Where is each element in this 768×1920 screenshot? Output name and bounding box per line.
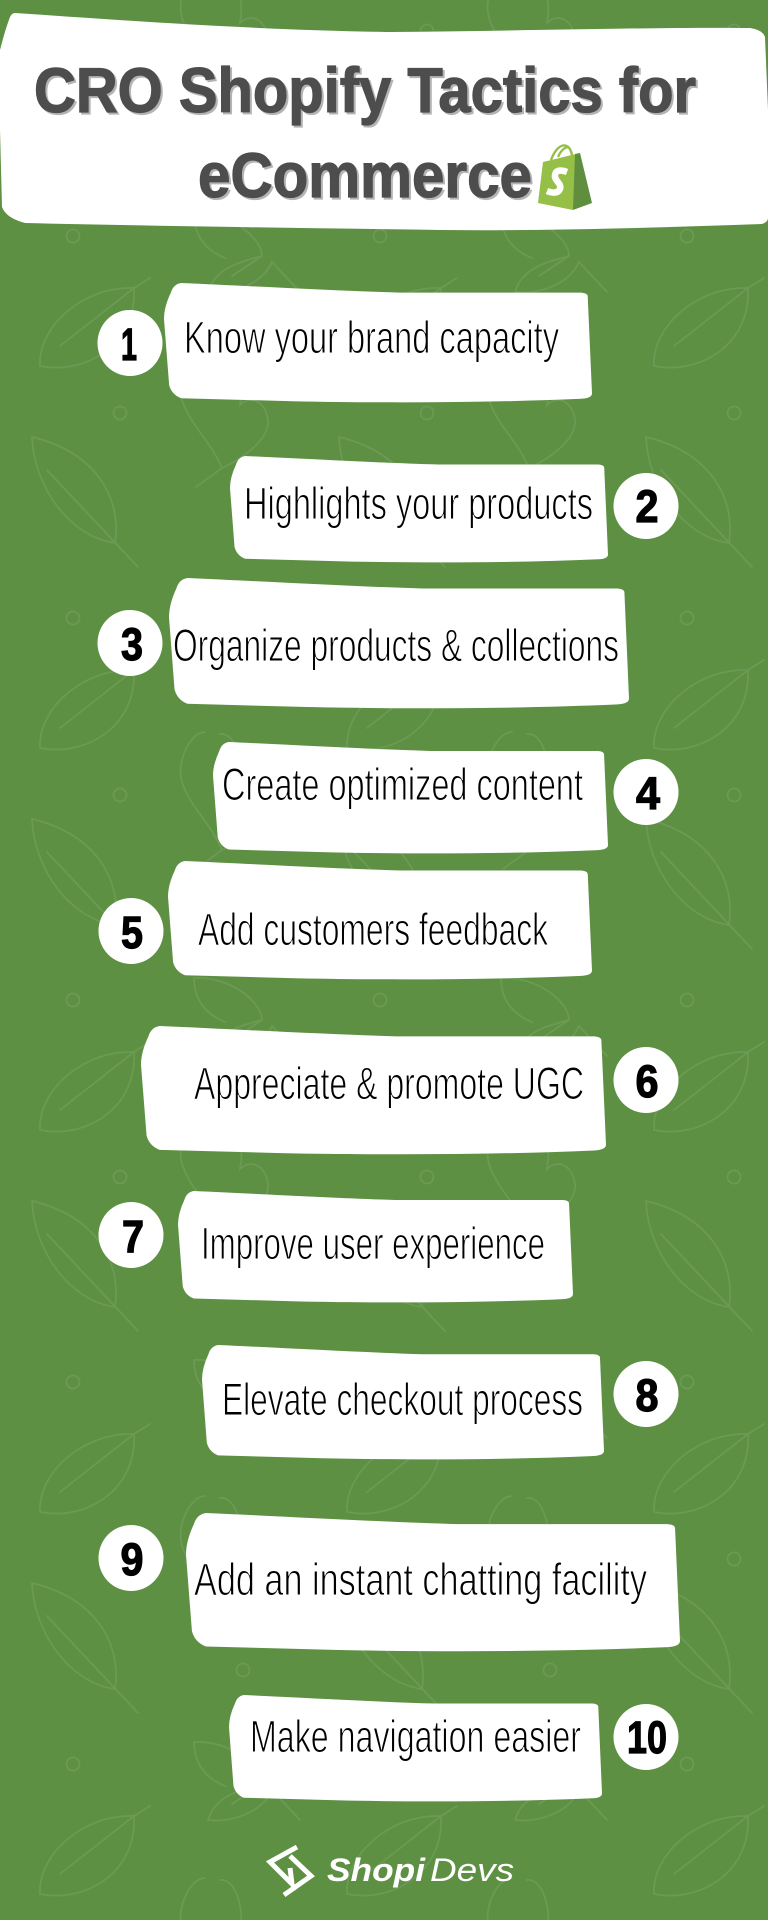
number badge 2: 2 xyxy=(636,481,658,532)
text 5: Add customers feedback xyxy=(198,904,548,955)
text 7: Improve user experience xyxy=(201,1218,545,1269)
logo: ShopiDevs xyxy=(270,1847,514,1895)
number badge 3: 3 xyxy=(121,619,143,670)
header white brush shape xyxy=(0,13,768,230)
box 2 xyxy=(230,456,608,562)
text 6: Appreciate & promote UGC xyxy=(194,1058,584,1109)
title text: CRO Shopify Tactics for xyxy=(36,58,698,128)
item 10 xyxy=(229,1695,678,1801)
number badge 6: 6 xyxy=(636,1056,658,1107)
number badge 9: 9 xyxy=(120,1534,144,1585)
item 7 xyxy=(98,1191,573,1302)
number badge 3 xyxy=(98,610,162,676)
number badge 5 xyxy=(98,898,164,964)
number badge 7: 7 xyxy=(122,1211,144,1262)
number badge 10 xyxy=(614,1704,678,1770)
number badge 4 xyxy=(614,759,678,825)
box 4 xyxy=(213,742,608,853)
title text: eCommerce xyxy=(200,143,534,213)
number badge 5: 5 xyxy=(121,907,143,958)
number badge 1 xyxy=(98,310,162,376)
number badge 9 xyxy=(98,1525,164,1591)
text 10: Make navigation easier xyxy=(250,1711,581,1762)
title text: eCommerce xyxy=(198,141,532,211)
icon: ShopiDevs mark xyxy=(270,1847,311,1895)
box 6 xyxy=(141,1026,606,1154)
panel: title header xyxy=(0,13,768,230)
icon: Shopify bag xyxy=(538,145,592,210)
text 2: Highlights your products xyxy=(244,478,593,529)
wordmark: Shopi xyxy=(327,1852,426,1888)
number badge 8 xyxy=(614,1361,678,1427)
item 2 xyxy=(230,456,678,562)
box 10 xyxy=(229,1695,602,1801)
title text: CRO Shopify Tactics for xyxy=(34,56,696,126)
box 9 xyxy=(186,1513,680,1651)
box 8 xyxy=(202,1345,604,1459)
number badge 6 xyxy=(614,1047,678,1113)
number badge 8: 8 xyxy=(636,1370,658,1421)
text 1: Know your brand capacity xyxy=(184,312,559,363)
number badge 7 xyxy=(98,1202,164,1268)
box 3 xyxy=(169,578,629,708)
item 9 xyxy=(98,1513,680,1651)
item 4 xyxy=(213,742,678,853)
item 5 xyxy=(98,861,592,979)
box 7 xyxy=(178,1191,573,1302)
wordmark: Devs xyxy=(430,1852,514,1888)
number badge 4: 4 xyxy=(636,768,660,819)
title text xyxy=(34,56,698,213)
item 1 xyxy=(98,283,592,402)
text 8: Elevate checkout process xyxy=(222,1374,583,1425)
number badge 10: 10 xyxy=(627,1712,667,1763)
item 6 xyxy=(141,1026,678,1154)
item 8 xyxy=(202,1345,678,1459)
number badge 1: 1 xyxy=(121,319,137,370)
box 1 xyxy=(164,283,592,402)
text 4: Create optimized content xyxy=(222,759,583,810)
box 5 xyxy=(168,861,592,979)
item 3 xyxy=(98,578,629,708)
number badge 2 xyxy=(614,473,678,539)
